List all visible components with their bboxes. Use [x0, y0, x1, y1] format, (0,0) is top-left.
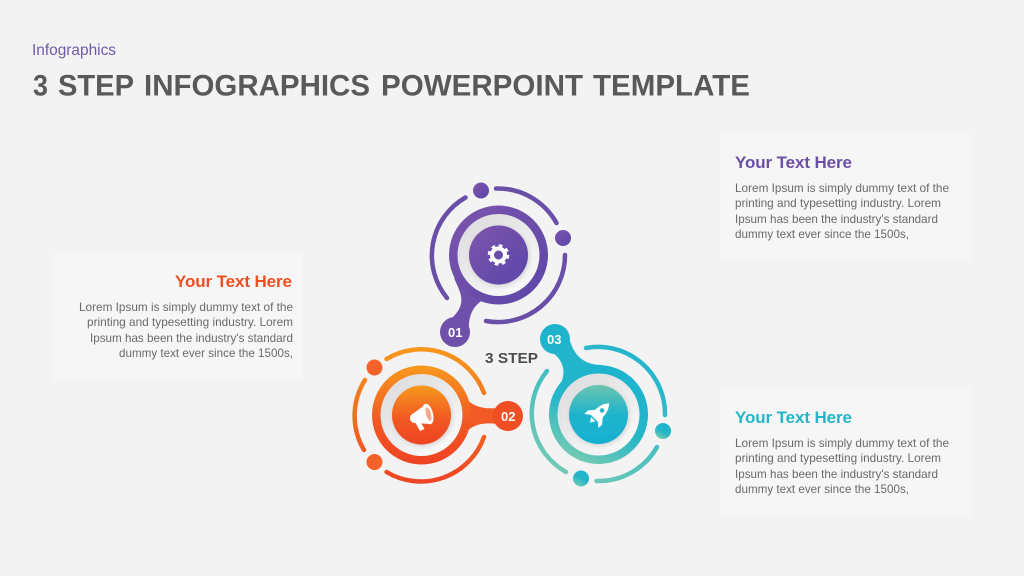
- title: STEP: [58, 70, 134, 102]
- step 01 purple: 01: [448, 325, 462, 340]
- panel: top right: Your Text Here: [735, 153, 852, 172]
- panel: bottom right: dummy text ever since the 1500s,: [735, 482, 909, 496]
- step 03 teal: 03: [547, 332, 561, 347]
- title: TEMPLATE: [593, 70, 750, 102]
- center label: 3 STEP: [485, 351, 538, 367]
- panel: top right: [721, 133, 972, 260]
- step 03 teal: [532, 324, 671, 486]
- title: POWERPOINT: [381, 70, 583, 102]
- panel: left: Ipsum has been the industry's standard: [90, 331, 293, 345]
- panel: left: dummy text ever since the 1500s,: [119, 346, 293, 360]
- subtitle: Infographics: [32, 42, 116, 59]
- panel: left: [52, 253, 302, 380]
- panel: bottom right: Your Text Here: [735, 408, 852, 427]
- panel: top right: printing and typesetting industry. Lorem: [735, 196, 941, 210]
- panel: bottom right: Ipsum has been the industry's standard: [735, 467, 938, 481]
- step 02 orange: 02: [501, 409, 515, 424]
- icon: gear: [489, 246, 508, 264]
- panel: left: Your Text Here: [175, 272, 292, 291]
- panel: left: printing and typesetting industry. Lorem: [87, 315, 293, 329]
- icon: rocket: [583, 396, 616, 430]
- step 01 purple: [432, 182, 571, 347]
- step 02 orange: [355, 349, 523, 481]
- panel: top right: Ipsum has been the industry's standard: [735, 212, 938, 226]
- panel: bottom right: Lorem Ipsum is simply dummy text of the: [735, 436, 949, 450]
- panel: top right: dummy text ever since the 1500s,: [735, 227, 909, 241]
- title: 3: [33, 70, 48, 102]
- panel: top right: Lorem Ipsum is simply dummy text of the: [735, 181, 949, 195]
- panel: bottom right: [721, 388, 972, 516]
- title: [33, 70, 750, 102]
- title: INFOGRAPHICS: [144, 70, 370, 102]
- icon: megaphone: [410, 403, 436, 431]
- panel: left: Lorem Ipsum is simply dummy text of the: [79, 300, 293, 314]
- panel: bottom right: printing and typesetting industry. Lorem: [735, 451, 941, 465]
